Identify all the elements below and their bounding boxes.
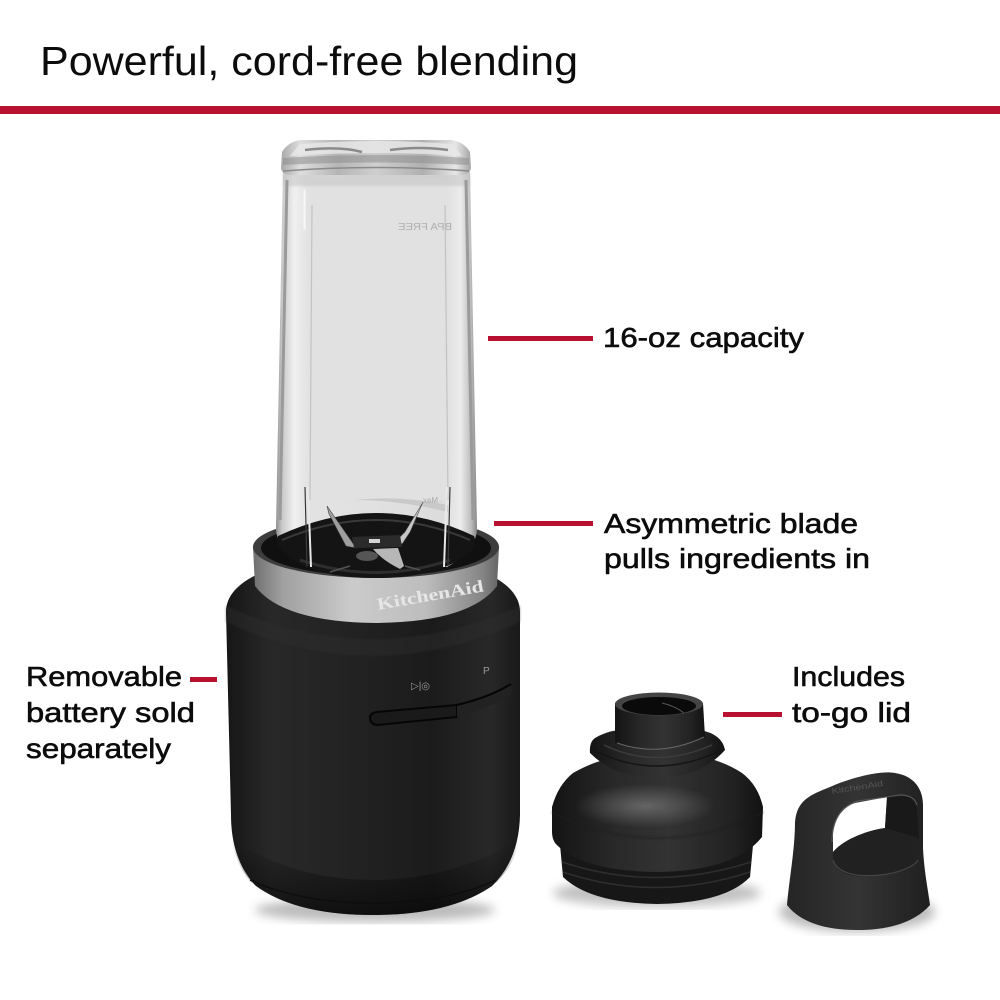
control icons: ▷|◎	[411, 681, 430, 692]
neck	[615, 703, 705, 749]
handle inner wall	[885, 795, 919, 838]
blender base	[226, 516, 520, 922]
lid shadow	[553, 879, 761, 907]
callout: asymmetric blade: Asymmetric blade	[604, 508, 858, 539]
jar interior dark	[277, 513, 475, 578]
callout: to-go lid: Includes	[792, 661, 905, 692]
jar rim	[281, 140, 471, 175]
slider button	[370, 705, 457, 725]
blender jar: Max	[423, 496, 438, 505]
callout: removable battery: separately	[26, 733, 171, 764]
brand wordmark: KitchenAid	[375, 576, 486, 614]
flange	[590, 730, 725, 778]
blade	[327, 502, 423, 569]
callout: 16-oz capacity: 16-oz capacity	[603, 322, 804, 353]
jar body	[276, 172, 477, 567]
cap wordmark: KitchenAid	[831, 779, 884, 796]
threads	[560, 845, 753, 904]
cap silhouette	[787, 772, 930, 930]
jar feet highlights	[308, 487, 447, 567]
title: Powerful, cord-free blending	[40, 38, 578, 84]
blender base: P	[483, 666, 490, 677]
callout: asymmetric blade	[494, 508, 870, 574]
ground shadow	[255, 898, 495, 922]
callout: removable battery: Removable	[26, 661, 182, 692]
callout: removable battery	[26, 661, 217, 764]
callout: removable battery: battery sold	[26, 697, 195, 728]
cap floor	[833, 828, 919, 877]
callout: to-go lid: to-go lid	[792, 697, 911, 728]
callout: asymmetric blade: pulls ingredients in	[604, 543, 870, 574]
handle window	[833, 797, 887, 852]
callout: to-go lid	[723, 661, 911, 728]
cap shadow	[779, 892, 935, 932]
dark collar	[253, 516, 499, 578]
callout: 16-oz capacity	[488, 322, 804, 353]
fill line marks	[355, 498, 448, 512]
blender jar	[276, 140, 477, 578]
to-go lid cap	[779, 772, 935, 932]
base body	[226, 575, 520, 915]
jar embossed text: BPA FREE	[398, 222, 452, 233]
silver ring	[253, 547, 499, 623]
lower body	[552, 752, 763, 872]
to-go lid body	[552, 692, 763, 907]
header rule	[0, 106, 1000, 114]
